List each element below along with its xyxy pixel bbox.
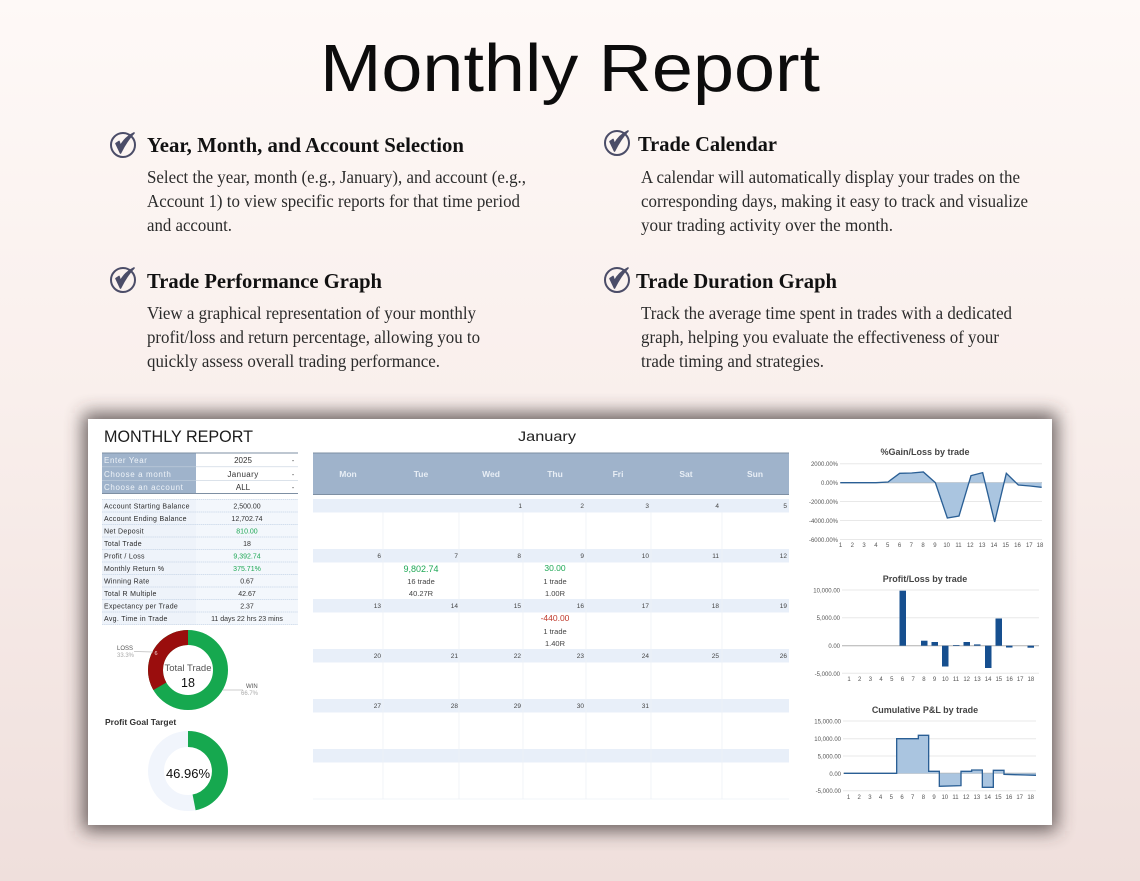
chart: win/loss donut: WIN: [246, 684, 258, 690]
chart: win/loss donut: 18: [181, 676, 195, 690]
chart: win/loss donut: 6: [154, 651, 158, 657]
calendar day numbers: 15: [514, 603, 521, 610]
icon: check circle: [111, 133, 135, 157]
table: account statistics: Winning Rate: [104, 578, 150, 586]
calendar weekday header: Tue: [414, 469, 429, 479]
heading: performance graph: Trade Performance Graph: [147, 269, 382, 293]
calendar entry: Jan 9: 1.00R: [545, 589, 566, 598]
text: calendar description: your trading activity over the month.: [641, 215, 893, 235]
chart: profit/loss by trade: 3: [869, 677, 873, 683]
chart: win/loss donut: [117, 638, 259, 702]
chart: %gain/loss by trade: 3: [862, 543, 866, 549]
calendar weekday header: Fri: [613, 469, 623, 479]
calendar day numbers: 8: [517, 553, 521, 560]
chart: profit/loss by trade: 10,000.00: [813, 588, 841, 594]
chart: cumulative p&l by trade: 5: [890, 795, 894, 801]
chart: profit/loss by trade: 5: [890, 677, 894, 683]
chart: profit/loss by trade: -5,000.00: [815, 672, 841, 678]
chart: profit/loss by trade: [813, 574, 1039, 683]
calendar day numbers: 10: [642, 553, 649, 560]
calendar day numbers: 23: [577, 653, 584, 660]
chart: cumulative p&l by trade: 7: [911, 795, 915, 801]
table: account statistics: 11 days 22 hrs 23 mins: [211, 616, 283, 623]
chart: %gain/loss by trade: 6: [898, 543, 902, 549]
table: account statistics: Net Deposit: [104, 528, 144, 536]
chart: cumulative p&l by trade: 11: [952, 795, 959, 801]
chart: cumulative p&l by trade: 15: [995, 795, 1002, 801]
calendar day numbers: 16: [577, 603, 584, 610]
chart: profit/loss by trade: 13: [974, 677, 981, 683]
table: account statistics: Expectancy per Trade: [104, 604, 178, 610]
calendar entry: Jan 7: 16 trade: [407, 577, 435, 586]
calendar day numbers: 18: [712, 603, 719, 610]
chart: cumulative p&l by trade: 10,000.00: [814, 737, 842, 743]
chart: profit/loss by trade: 5,000.00: [817, 616, 841, 622]
calendar day numbers: 12: [780, 553, 787, 560]
text: selection description: Select the year, month (e.g., January), and account (e.g.,: [147, 167, 526, 187]
chart: %gain/loss by trade: 10: [943, 543, 951, 549]
calendar entry: Jan 7: 40.27R: [409, 589, 434, 598]
table: account statistics: 0.67: [240, 578, 254, 586]
chart: profit goal donut: [156, 739, 220, 803]
calendar entry: Jan 16: -440.00: [541, 613, 570, 623]
table: account statistics: 18: [243, 541, 251, 548]
chart: %gain/loss by trade: 5: [886, 543, 890, 549]
icon: check circle: [605, 268, 629, 292]
calendar day numbers: 21: [451, 653, 458, 660]
panel: selection form: Choose an account: [104, 483, 184, 492]
chart: profit/loss by trade: 11: [953, 677, 960, 683]
panel: spreadsheet dashboard: [88, 419, 1052, 825]
calendar day numbers: 25: [712, 653, 719, 660]
text: duration description: [641, 303, 1012, 371]
calendar day numbers: 31: [642, 703, 649, 710]
calendar entry: Jan 16: [541, 613, 570, 648]
table: account statistics: Total R Multiple: [104, 591, 157, 598]
calendar day numbers: 19: [780, 603, 787, 610]
chart: cumulative p&l by trade: 9: [932, 795, 936, 801]
chart: %gain/loss by trade: 13: [979, 543, 986, 549]
chart: profit/loss by trade: 4: [879, 677, 883, 683]
text: performance description: View a graphical representation of your monthly: [147, 303, 476, 323]
calendar entry: Jan 16: 1 trade: [543, 627, 567, 636]
chart: %gain/loss by trade: -4000.00%: [809, 519, 839, 525]
table: account statistics: 9,392.74: [233, 554, 261, 560]
feature: trade duration graph: [605, 268, 1012, 371]
chart: cumulative p&l by trade: [814, 705, 1036, 801]
table: account statistics: Account Ending Balance: [104, 516, 187, 523]
panel: selection form: -: [292, 458, 295, 465]
chart: cumulative p&l by trade: Cumulative P&L by trade: [872, 705, 978, 715]
chart: %gain/loss by trade: 7: [910, 543, 914, 549]
chart: cumulative p&l by trade: 14: [984, 795, 992, 801]
table: account statistics: 810.00: [236, 528, 258, 536]
panel: selection form: -: [292, 485, 295, 492]
feature: trade calendar: [605, 131, 1028, 235]
calendar day numbers: 2: [580, 503, 584, 510]
chart: %gain/loss by trade: [809, 447, 1044, 549]
calendar day numbers: 26: [780, 653, 787, 660]
chart: %gain/loss by trade: 1: [839, 543, 843, 549]
table: account statistics: Total Trade: [104, 541, 142, 548]
calendar day numbers: 27: [374, 703, 381, 710]
heading: profit goal target: Profit Goal Target: [105, 717, 176, 727]
table: account statistics: Account Starting Balance: [104, 504, 190, 510]
chart: profit/loss by trade: 2: [858, 677, 862, 683]
chart: cumulative p&l by trade: 12: [963, 795, 970, 801]
chart: %gain/loss by trade: 12: [967, 543, 974, 549]
chart: %gain/loss by trade: 9: [933, 543, 937, 549]
chart: %gain/loss by trade: 18: [1037, 543, 1044, 549]
panel: selection form: [102, 452, 298, 494]
chart: cumulative p&l by trade: 18: [1027, 795, 1035, 801]
chart: cumulative p&l by trade: 15,000.00: [814, 720, 842, 726]
text: calendar description: A calendar will automatically display your trades on the: [641, 167, 1020, 187]
calendar weekday header: [313, 452, 789, 495]
heading: trade calendar: Trade Calendar: [638, 132, 777, 156]
chart: profit/loss by trade: 16: [1006, 677, 1013, 683]
calendar day numbers: 4: [715, 503, 719, 510]
chart: profit/loss by trade: 8: [922, 677, 926, 683]
chart: profit/loss by trade: 6: [901, 677, 905, 683]
chart: profit/loss by trade: 9: [933, 677, 937, 683]
chart: %gain/loss by trade: -6000.00%: [809, 538, 839, 544]
calendar day numbers: [374, 503, 787, 710]
title: Monthly Report: [320, 31, 820, 106]
chart: cumulative p&l by trade: 1: [847, 795, 851, 801]
calendar entry: Jan 9: 1 trade: [543, 577, 567, 586]
chart: profit/loss by trade: 18: [1028, 677, 1035, 683]
calendar weekday header: Sat: [679, 469, 693, 479]
table: account statistics: Monthly Return %: [104, 566, 164, 573]
calendar day numbers: 5: [783, 503, 787, 510]
chart: %gain/loss by trade: -2000.00%: [809, 500, 839, 506]
chart: win/loss donut: 33.3%: [117, 653, 135, 659]
panel: selection form: 2025: [234, 456, 252, 465]
calendar day numbers: 30: [577, 703, 584, 710]
text: calendar description: [641, 167, 1028, 235]
chart: cumulative p&l by trade: 16: [1006, 795, 1013, 801]
panel: selection form: Choose a month: [104, 470, 171, 479]
heading: monthly report sheet title: MONTHLY REPORT: [104, 427, 253, 446]
text: calendar description: corresponding days, making it easy to track and visualize: [641, 191, 1028, 211]
chart: win/loss donut: LOSS: [117, 646, 133, 652]
table: account statistics: 12,702.74: [231, 516, 263, 523]
chart: %gain/loss by trade: 11: [955, 543, 962, 549]
chart: cumulative p&l by trade: 17: [1016, 795, 1024, 801]
table: account statistics: Profit / Loss: [104, 554, 145, 560]
text: selection description: Account 1) to view specific reports for that time period: [147, 191, 520, 211]
chart: profit/loss by trade: Profit/Loss by trade: [883, 574, 967, 584]
text: performance description: quickly assess overall trading performance.: [147, 351, 440, 371]
table: account statistics: 2,500.00: [233, 504, 261, 510]
calendar day numbers: 11: [712, 553, 719, 560]
calendar day numbers: 20: [374, 653, 381, 660]
calendar day numbers: 9: [580, 553, 584, 560]
chart: %gain/loss by trade: 16: [1014, 543, 1021, 549]
calendar entry: Jan 16: 1.40R: [545, 639, 566, 648]
table: account statistics: 2.37: [240, 604, 254, 610]
calendar day numbers: 1: [518, 503, 522, 510]
calendar entry: Jan 7: 9,802.74: [403, 564, 439, 574]
feature: trade performance graph: [111, 268, 480, 371]
table: account statistics: Avg. Time in Trade: [104, 616, 168, 623]
icon: check circle: [605, 131, 629, 155]
text: selection description: [147, 167, 526, 235]
chart: %gain/loss by trade: 2000.00%: [811, 462, 839, 468]
chart: profit/loss by trade: 10: [942, 677, 949, 683]
calendar weekday header: Wed: [482, 469, 500, 479]
panel: selection form: Enter Year: [104, 456, 148, 465]
chart: cumulative p&l by trade: 4: [879, 795, 883, 801]
chart: profit/loss by trade: 7: [912, 677, 916, 683]
panel: selection form: January: [227, 470, 259, 479]
text: duration description: trade timing and strategies.: [641, 351, 824, 371]
calendar entry: Jan 9: [543, 563, 567, 598]
chart: %gain/loss by trade: %Gain/Loss by trade: [880, 447, 970, 457]
chart: %gain/loss by trade: 8: [921, 543, 925, 549]
table: account statistics: 375.71%: [233, 566, 261, 573]
text: performance description: profit/loss and return percentage, allowing you to: [147, 327, 480, 347]
chart: profit/loss by trade: 17: [1017, 677, 1024, 683]
chart: %gain/loss by trade: 15: [1002, 543, 1010, 549]
chart: %gain/loss by trade: 17: [1026, 543, 1033, 549]
chart: cumulative p&l by trade: 2: [858, 795, 862, 801]
chart: cumulative p&l by trade: 8: [922, 795, 926, 801]
chart: profit/loss by trade: 1: [847, 677, 851, 683]
calendar day numbers: 7: [454, 553, 458, 560]
text: selection description: and account.: [147, 215, 232, 235]
chart: cumulative p&l by trade: 3: [868, 795, 872, 801]
table: account statistics: 42.67: [238, 591, 256, 598]
panel: selection form: ALL: [236, 483, 251, 492]
calendar day numbers: 3: [645, 503, 649, 510]
chart: profit/loss by trade: 15: [995, 677, 1003, 683]
panel: trade calendar: [313, 452, 789, 799]
heading: january: January: [518, 428, 576, 444]
chart: cumulative p&l by trade: 5,000.00: [818, 754, 842, 760]
chart: %gain/loss by trade: 14: [991, 543, 998, 549]
panel: selection form: -: [292, 472, 295, 479]
text: duration description: Track the average time spent in trades with a dedicated: [641, 303, 1012, 323]
chart: cumulative p&l by trade: 0.00: [829, 772, 842, 778]
calendar weekday header: Thu: [547, 469, 563, 479]
chart: win/loss donut: 66.7%: [241, 691, 259, 697]
chart: profit/loss by trade: 14: [985, 677, 992, 683]
calendar day numbers: 13: [374, 603, 381, 610]
calendar day numbers: 17: [642, 603, 649, 610]
feature: year, month and account selection: [111, 133, 526, 235]
calendar weekday header: Mon: [339, 469, 357, 479]
calendar day numbers: 22: [514, 653, 521, 660]
table: account statistics: [102, 500, 298, 624]
chart: profit/loss by trade: 0.00: [828, 644, 841, 650]
heading: selection: Year, Month, and Account Selection: [147, 133, 464, 157]
chart: cumulative p&l by trade: 10: [941, 795, 949, 801]
text: performance description: [147, 303, 480, 371]
calendar day numbers: 24: [642, 653, 649, 660]
chart: win/loss donut: Total Trade: [164, 663, 212, 674]
chart: cumulative p&l by trade: 6: [900, 795, 904, 801]
icon: check circle: [111, 268, 135, 292]
heading: duration graph: Trade Duration Graph: [636, 269, 837, 293]
chart: profit/loss by trade: 12: [963, 677, 971, 683]
chart: %gain/loss by trade: 0.00%: [821, 481, 839, 487]
panel shadow: [83, 413, 1057, 831]
chart: cumulative p&l by trade: -5,000.00: [816, 789, 842, 795]
calendar weekday header: Sun: [747, 469, 763, 479]
chart: cumulative p&l by trade: 13: [974, 795, 981, 801]
calendar day numbers: 14: [451, 603, 458, 610]
chart: profit goal donut: 46.96%: [166, 766, 210, 781]
calendar day numbers: 28: [451, 703, 458, 710]
calendar entry: Jan 7: [403, 564, 439, 598]
chart: %gain/loss by trade: 2: [851, 543, 855, 549]
calendar day numbers: 29: [514, 703, 521, 710]
calendar day numbers: 6: [377, 553, 381, 560]
chart: %gain/loss by trade: 4: [874, 543, 878, 549]
calendar entry: Jan 9: 30.00: [544, 563, 566, 573]
text: duration description: graph, helping you evaluate the effectiveness of your: [641, 327, 999, 347]
